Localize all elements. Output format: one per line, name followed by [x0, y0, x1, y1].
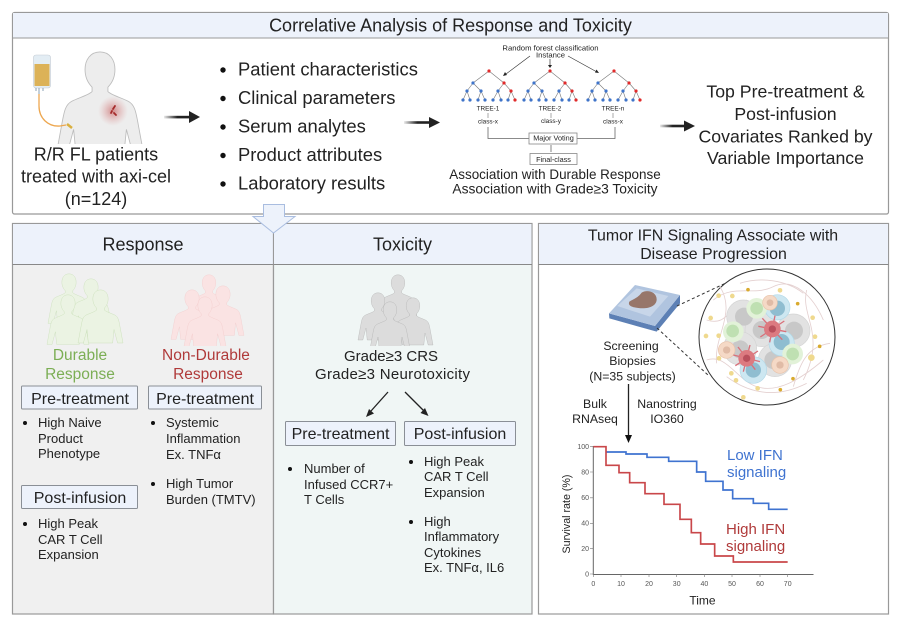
list: toxicity post-infusion factors: Inflammatory: [424, 529, 500, 544]
list: toxicity pre-treatment factors: Number of: [304, 461, 365, 476]
diagram: random forest: Final-class: [536, 155, 571, 164]
label: durable response: Response: [45, 366, 115, 383]
diagram: random forest: Instance: [536, 50, 565, 60]
text: top covariates: Variable Importance: [707, 148, 864, 168]
chart: survival curves: 10: [617, 581, 625, 588]
list: non-durable factors: Inflammation: [166, 431, 240, 446]
list: non-durable factors: Systemic: [166, 415, 219, 430]
diagram: random forest: TREE-n: [602, 106, 625, 112]
list: data categories: Patient characteristics: [238, 58, 418, 80]
list: durable pre-treatment factors: Phenotype: [38, 446, 100, 461]
diagram: random forest: class-y: [541, 118, 562, 125]
box: non-durable pre-treatment: Pre-treatment: [156, 391, 254, 408]
chart: survival curves: 100: [577, 444, 589, 451]
label: toxicity grades: Grade≥3 CRS: [344, 348, 438, 365]
box: durable pre-treatment: Pre-treatment: [31, 391, 129, 408]
heading: correlative analysis: Correlative Analysis of Response and Toxicity: [269, 16, 632, 36]
list: durable pre-treatment factors: Product: [38, 431, 83, 446]
chart: survival curves: 60: [756, 581, 764, 588]
arrow: biopsies to survival: [625, 384, 632, 443]
label: low IFN signaling: signaling: [727, 464, 786, 481]
text: top covariates: Top Pre-treatment &: [706, 82, 865, 102]
diagram: random forest: TREE-1: [477, 106, 500, 112]
label: high IFN signaling: [726, 521, 785, 555]
panel: toxicity: [274, 224, 532, 614]
icon: patient with infusion: [33, 52, 142, 144]
list: durable post-infusion factors: CAR T Cell: [38, 532, 103, 547]
chart: survival curves: [561, 444, 814, 608]
list: toxicity post-infusion factors: Expansion: [424, 485, 485, 500]
label: screening biopsies: [589, 339, 676, 384]
label: durable response: Durable: [53, 347, 107, 364]
box: toxicity pre-treatment: [286, 422, 396, 446]
list: durable pre-treatment factors: High Naive: [38, 415, 102, 430]
icon: patients with toxicity: [358, 275, 433, 349]
text: top covariates: Post-infusion: [734, 104, 837, 124]
box: durable post-infusion: Post-infusion: [34, 490, 126, 507]
arrow: to post-infusion: [405, 392, 428, 416]
chart: survival curves: 20: [581, 546, 589, 553]
arrow: model to covariates: [660, 120, 695, 132]
label: high IFN signaling: signaling: [726, 538, 785, 555]
icon: biopsy slide: [609, 285, 680, 332]
text: associations: Association with Durable Response: [449, 167, 661, 182]
panel: correlative analysis: [12, 12, 888, 214]
box: durable pre-treatment: [22, 386, 138, 409]
list: toxicity post-infusion factors: [409, 454, 504, 575]
text: patient cohort: treated with axi-cel: [21, 166, 171, 186]
text: top covariates: [698, 82, 873, 168]
list: non-durable factors: [151, 415, 256, 507]
chart: survival curves: 60: [581, 495, 589, 502]
heading: tumor IFN signaling: [588, 228, 838, 263]
list: toxicity post-infusion factors: High: [424, 514, 451, 529]
lines: zoom to tumor: [657, 282, 728, 375]
text: patient cohort: [21, 144, 171, 209]
list: data categories: [220, 58, 418, 194]
chart: survival curves: 70: [784, 581, 792, 588]
diagram: random forest: Major Voting: [533, 134, 574, 142]
chart: survival curves: 50: [728, 581, 736, 588]
label: non-durable response: Response: [173, 366, 243, 383]
chart: survival curves: 80: [581, 470, 589, 476]
diagram: random forest: class-x: [478, 118, 499, 126]
label: bulk RNAseq: Bulk: [583, 397, 608, 411]
heading: tumor IFN signaling: Disease Progression: [640, 246, 787, 263]
label: bulk RNAseq: RNAseq: [572, 412, 618, 426]
list: data categories: Clinical parameters: [238, 87, 395, 108]
chart: survival curves: 40: [581, 520, 589, 528]
chart: survival curves: Time: [689, 594, 716, 608]
chart: survival curves: 30: [673, 581, 681, 588]
text: associations: Association with Grade≥3 Toxicity: [452, 182, 658, 196]
arrow: down outline: [253, 204, 295, 233]
diagram: random forest: [461, 44, 642, 164]
label: non-durable response: [162, 347, 250, 383]
label: durable response: [45, 347, 115, 383]
list: toxicity post-infusion factors: CAR T Cell: [424, 469, 489, 484]
box: non-durable pre-treatment: [148, 386, 262, 409]
label: toxicity grades: [315, 348, 470, 383]
label: screening biopsies: Screening: [603, 339, 659, 353]
icon: non-durable responders: [171, 275, 244, 346]
list: durable pre-treatment factors: [23, 415, 102, 461]
label: bulk RNAseq: [572, 397, 618, 426]
panel: response: [12, 224, 274, 614]
text: patient cohort: (n=124): [65, 189, 127, 209]
box: toxicity pre-treatment: Pre-treatment: [292, 426, 390, 443]
heading: tumor IFN signaling: Tumor IFN Signaling Associate with: [588, 228, 838, 244]
label: Nanostring IO360: IO360: [650, 412, 684, 426]
box: toxicity post-infusion: Post-infusion: [414, 426, 506, 443]
arrow: to pre-treatment: [366, 392, 388, 417]
list: durable post-infusion factors: Expansion: [38, 547, 99, 562]
text: top covariates: Covariates Ranked by: [698, 126, 873, 146]
label: non-durable response: Non-Durable: [162, 347, 250, 364]
heading: response: Response: [102, 234, 184, 254]
list: durable post-infusion factors: [23, 516, 103, 562]
text: associations: [449, 167, 661, 196]
list: toxicity post-infusion factors: High Peak: [424, 454, 484, 469]
diagram: random forest: class-x: [603, 118, 624, 126]
arrow: patients to data: [164, 111, 200, 123]
text: patient cohort: R/R FL patients: [34, 144, 158, 164]
list: non-durable factors: High Tumor: [166, 476, 234, 491]
list: non-durable factors: Ex. TNFα: [166, 447, 221, 462]
label: Nanostring IO360: Nanostring: [637, 397, 697, 411]
list: data categories: Product attributes: [238, 144, 382, 165]
list: toxicity post-infusion factors: Ex. TNFα, IL6: [424, 560, 504, 575]
box: durable post-infusion: [22, 486, 138, 508]
box: toxicity post-infusion: [404, 422, 516, 446]
list: toxicity pre-treatment factors: Infused CCR7+: [304, 477, 393, 492]
panel: tumor IFN signaling: [538, 224, 888, 614]
icon: durable responders: [47, 274, 123, 344]
list: data categories: Serum analytes: [238, 116, 366, 136]
list: toxicity pre-treatment factors: T Cells: [304, 492, 345, 507]
label: toxicity grades: Grade≥3 Neurotoxicity: [315, 366, 470, 383]
heading: toxicity: Toxicity: [373, 234, 432, 254]
label: low IFN signaling: Low IFN: [727, 447, 783, 464]
chart: survival curves: 40: [701, 581, 708, 588]
diagram: random forest: TREE-2: [539, 106, 562, 112]
list: durable post-infusion factors: High Peak: [38, 516, 98, 531]
diagram: random forest: Random forest classification: [502, 44, 599, 52]
chart: survival curves: 20: [645, 581, 653, 588]
label: low IFN signaling: [727, 447, 786, 481]
chart: survival curves: Survival rate (%): [561, 474, 573, 554]
label: screening biopsies: Biopsies: [609, 354, 656, 368]
list: toxicity pre-treatment factors: [288, 461, 393, 507]
label: high IFN signaling: High IFN: [726, 521, 785, 538]
label: screening biopsies: (N=35 subjects): [589, 370, 676, 384]
list: data categories: Laboratory results: [238, 172, 385, 194]
icon: tumor microenvironment: [699, 269, 835, 405]
label: Nanostring IO360: [637, 397, 697, 426]
chart: survival curves: 0: [585, 572, 589, 578]
chart: survival curves: 0: [591, 581, 595, 588]
list: non-durable factors: Burden (TMTV): [166, 492, 256, 507]
arrow: data to model: [404, 117, 440, 128]
list: toxicity post-infusion factors: Cytokines: [424, 545, 482, 560]
